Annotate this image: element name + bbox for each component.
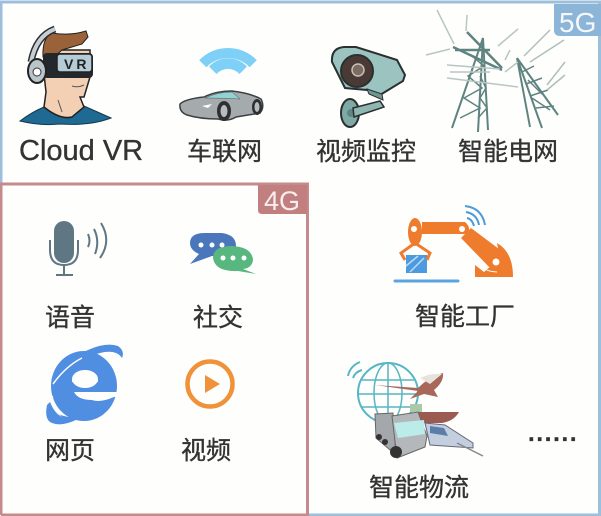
label: 智能工厂: 智能工厂 — [415, 303, 515, 331]
label: 视频监控: 视频监控 — [316, 138, 416, 166]
icon: connected car — [180, 48, 263, 121]
icon: surveillance camera — [332, 47, 405, 127]
icon: robot arm — [395, 206, 513, 281]
label: 语音: 语音 — [45, 304, 95, 332]
icon: chat bubbles — [190, 233, 256, 274]
label: 视频: 视频 — [181, 437, 231, 465]
icon: microphone — [50, 221, 106, 275]
icon: VR user: VR — [64, 56, 89, 72]
icon: VR user — [20, 29, 111, 125]
icon: web browser — [46, 345, 123, 424]
icon: power pylons — [426, 10, 565, 132]
4G badge: 4G — [264, 186, 300, 216]
ellipsis: ...... — [528, 420, 578, 447]
panel: 4G frame — [1, 184, 308, 515]
icon: logistics — [348, 362, 483, 458]
label: 网页: 网页 — [45, 437, 95, 465]
5G badge: 5G — [559, 7, 596, 38]
label: 社交: 社交 — [193, 304, 243, 332]
label: 智能物流: 智能物流 — [369, 474, 469, 502]
label: Cloud VR: Cloud VR — [19, 135, 143, 167]
icon: video play — [188, 362, 232, 406]
label: 车联网: 车联网 — [187, 138, 262, 166]
label: 智能电网: 智能电网 — [458, 138, 558, 166]
